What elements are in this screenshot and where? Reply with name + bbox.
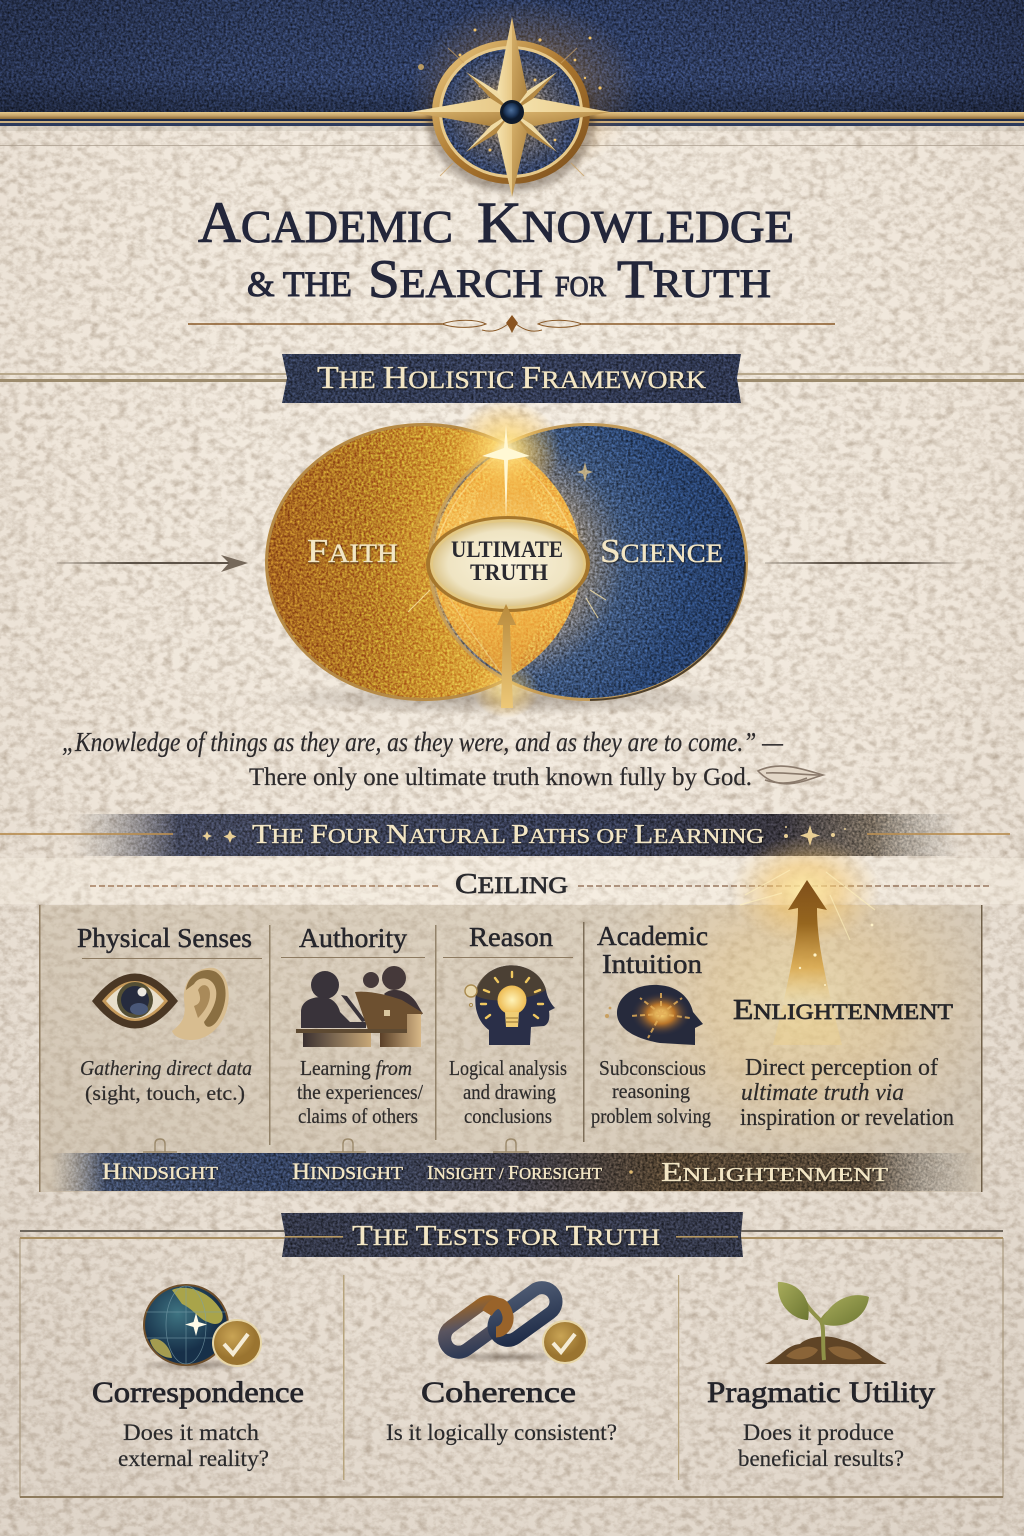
- upward arrow: [472, 604, 540, 718]
- banner: the holistic framework: THE HOLISTIC FRAMEWORK: [317, 359, 706, 395]
- column: academic intuition: Intuition: [602, 949, 703, 979]
- faith circle: [265, 423, 583, 701]
- bottom bar: foresight levels: [50, 1139, 980, 1191]
- ultimate truth oval: ULTIMATE: [451, 537, 563, 562]
- column: coherence: Is it logically consistent?: [386, 1420, 617, 1445]
- column: correspondence: Correspondence: [92, 1376, 304, 1409]
- column: reason: conclusions: [464, 1104, 552, 1128]
- column: academic intuition: reasoning: [612, 1079, 690, 1103]
- band: four natural paths of learning: THE FOUR NATURAL PATHS OF LEARNING: [252, 819, 764, 849]
- column: physical senses: Gathering direct data: [80, 1056, 252, 1080]
- column: reason: Logical analysis: [449, 1056, 567, 1080]
- column: pragmatic utility: Does it produce: [743, 1420, 894, 1445]
- icon: chain links with check badge: [439, 1282, 588, 1364]
- column: reason: [435, 922, 573, 1140]
- cardinal points: [410, 17, 610, 197]
- column: physical senses: [77, 923, 262, 1105]
- title: FOR: [555, 271, 607, 303]
- title: & THE: [247, 264, 352, 304]
- diagonal points: [466, 72, 557, 152]
- column: reason: and drawing: [463, 1080, 556, 1104]
- icon: seedling: [765, 1282, 887, 1364]
- column: academic intuition: Subconscious: [599, 1056, 706, 1080]
- column: academic intuition: Academic: [597, 921, 708, 951]
- header band: [0, 0, 1024, 146]
- icon: glowing brain head: [605, 985, 703, 1045]
- title: ACADEMIC: [198, 190, 453, 255]
- column: enlightenment: ultimate truth via: [741, 1080, 904, 1106]
- column: physical senses: Physical Senses: [77, 923, 252, 953]
- ornamental divider: [188, 315, 835, 332]
- ceiling line and label: CEILING: [455, 868, 568, 900]
- banner: the tests for truth: [281, 1212, 743, 1257]
- column: authority: the experiences/: [297, 1080, 423, 1104]
- icon: people learning: [296, 966, 423, 1047]
- icon: compass star emblem: [410, 0, 640, 197]
- icon: eye and ear: [92, 968, 229, 1040]
- column: authority: [269, 923, 425, 1145]
- section rules: holistic framework: [0, 373, 1024, 382]
- tests panel frame: [20, 1231, 1003, 1497]
- column: pragmatic utility: Pragmatic Utility: [707, 1376, 935, 1409]
- quote: „Knowledge of things as they are, as they were, and as they are to come.” —: [62, 727, 784, 757]
- column: correspondence: Does it match: [123, 1420, 260, 1445]
- column: physical senses: (sight, touch, etc.): [85, 1081, 245, 1105]
- column: coherence: [343, 1275, 617, 1480]
- bottom bar: foresight levels: HINDSIGHT: [292, 1159, 403, 1184]
- ultimate truth oval: TRUTH: [470, 560, 548, 585]
- band: four natural paths of learning: [0, 814, 1010, 856]
- enlightenment arrow with glow: [730, 835, 880, 1045]
- column: coherence: Coherence: [421, 1376, 576, 1409]
- column: pragmatic utility: [678, 1275, 935, 1480]
- column: reason: Reason: [469, 922, 554, 952]
- icon: quill leaf: [758, 766, 823, 784]
- column: correspondence: external reality?: [118, 1446, 269, 1471]
- column: authority: Authority: [299, 923, 408, 953]
- venn diagram: faith and science: [255, 400, 755, 718]
- column: enlightenment: inspiration or revelation: [740, 1105, 954, 1131]
- column: authority: Learning from: [300, 1056, 412, 1080]
- quote: [62, 727, 784, 791]
- ultimate truth oval: [426, 516, 590, 612]
- column: pragmatic utility: beneficial results?: [738, 1446, 904, 1471]
- column: enlightenment: Direct perception of: [745, 1055, 938, 1081]
- science label: SCIENCE: [600, 533, 723, 570]
- title: SEARCH: [368, 249, 543, 309]
- quote: There only one ultimate truth known fully by God.: [249, 764, 752, 791]
- column: authority: claims of others: [298, 1104, 418, 1128]
- bottom bar: foresight levels: ENLIGHTENMENT: [661, 1157, 888, 1187]
- column: enlightenment: ENLIGHTENMENT: [733, 994, 954, 1026]
- science circle: [428, 423, 748, 701]
- title: KNOWLEDGE: [477, 190, 794, 255]
- column: academic intuition: [583, 921, 711, 1142]
- title: TRUTH: [617, 249, 771, 309]
- bottom bar: foresight levels: INSIGHT / FORESIGHT: [427, 1162, 603, 1184]
- column: enlightenment: [733, 994, 954, 1131]
- faith label: FAITH: [307, 533, 398, 570]
- title: [198, 190, 794, 309]
- arrow: left pointer: [57, 555, 248, 572]
- bottom bar: foresight levels: HINDSIGHT: [102, 1159, 218, 1184]
- line: right pointer: [765, 562, 966, 564]
- paths panel: [39, 905, 982, 1192]
- column: correspondence: [92, 1284, 304, 1471]
- column: academic intuition: problem solving: [591, 1104, 711, 1128]
- overlap glow: [380, 400, 630, 675]
- icon: head with light bulb: [465, 965, 555, 1045]
- banner: the holistic framework: [282, 354, 741, 403]
- icon: globe with check badge: [137, 1284, 262, 1371]
- banner: the tests for truth: THE TESTS FOR TRUTH: [352, 1220, 660, 1252]
- overlap lens: [435, 447, 579, 676]
